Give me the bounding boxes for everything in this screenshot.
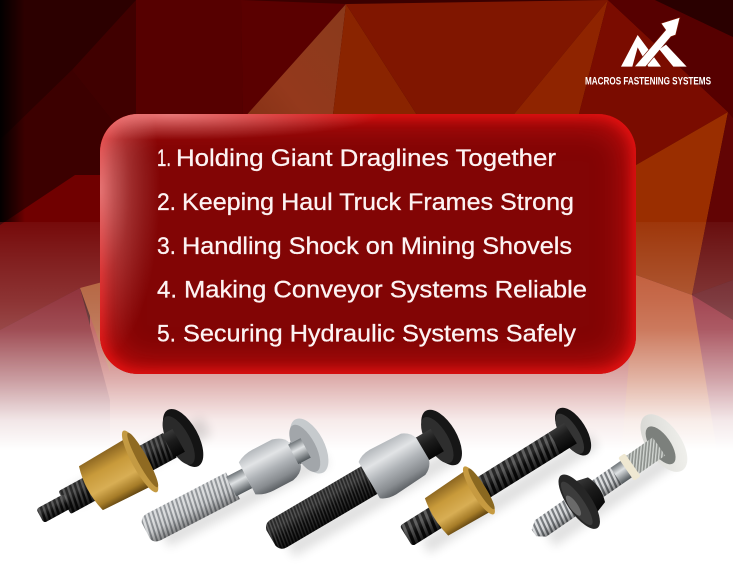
list item 4: 4.: [157, 276, 177, 304]
list item 3: Handling Shock on Mining Shovels: [182, 233, 572, 260]
list item 2: Keeping Haul Truck Frames Strong: [182, 189, 574, 216]
fastener 3: black bolt with silver sleeve: [255, 403, 470, 565]
list item 5: 5.: [157, 320, 176, 348]
list item 1: 1.: [157, 145, 171, 172]
list of five uses: [157, 145, 587, 348]
panel: red rounded list card: [100, 114, 636, 374]
fastener 5: silver stud with black washer and white cap: [515, 406, 697, 560]
fastener 1: black bolt with brass collar: [23, 400, 213, 547]
shadows under fasteners: [69, 417, 679, 557]
fastener 4: long black bolt with brass collar: [391, 401, 599, 560]
list item 1: Holding Giant Draglines Together: [176, 145, 556, 172]
list item 4: Making Conveyor Systems Reliable: [184, 276, 587, 304]
list item 5: Securing Hydraulic Systems Safely: [183, 320, 576, 348]
list item 2: 2.: [157, 189, 176, 216]
list item 3: 3.: [157, 233, 176, 260]
fastener 2: silver bolt: [132, 413, 336, 558]
icon: mountains and rising arrow: [621, 17, 687, 67]
